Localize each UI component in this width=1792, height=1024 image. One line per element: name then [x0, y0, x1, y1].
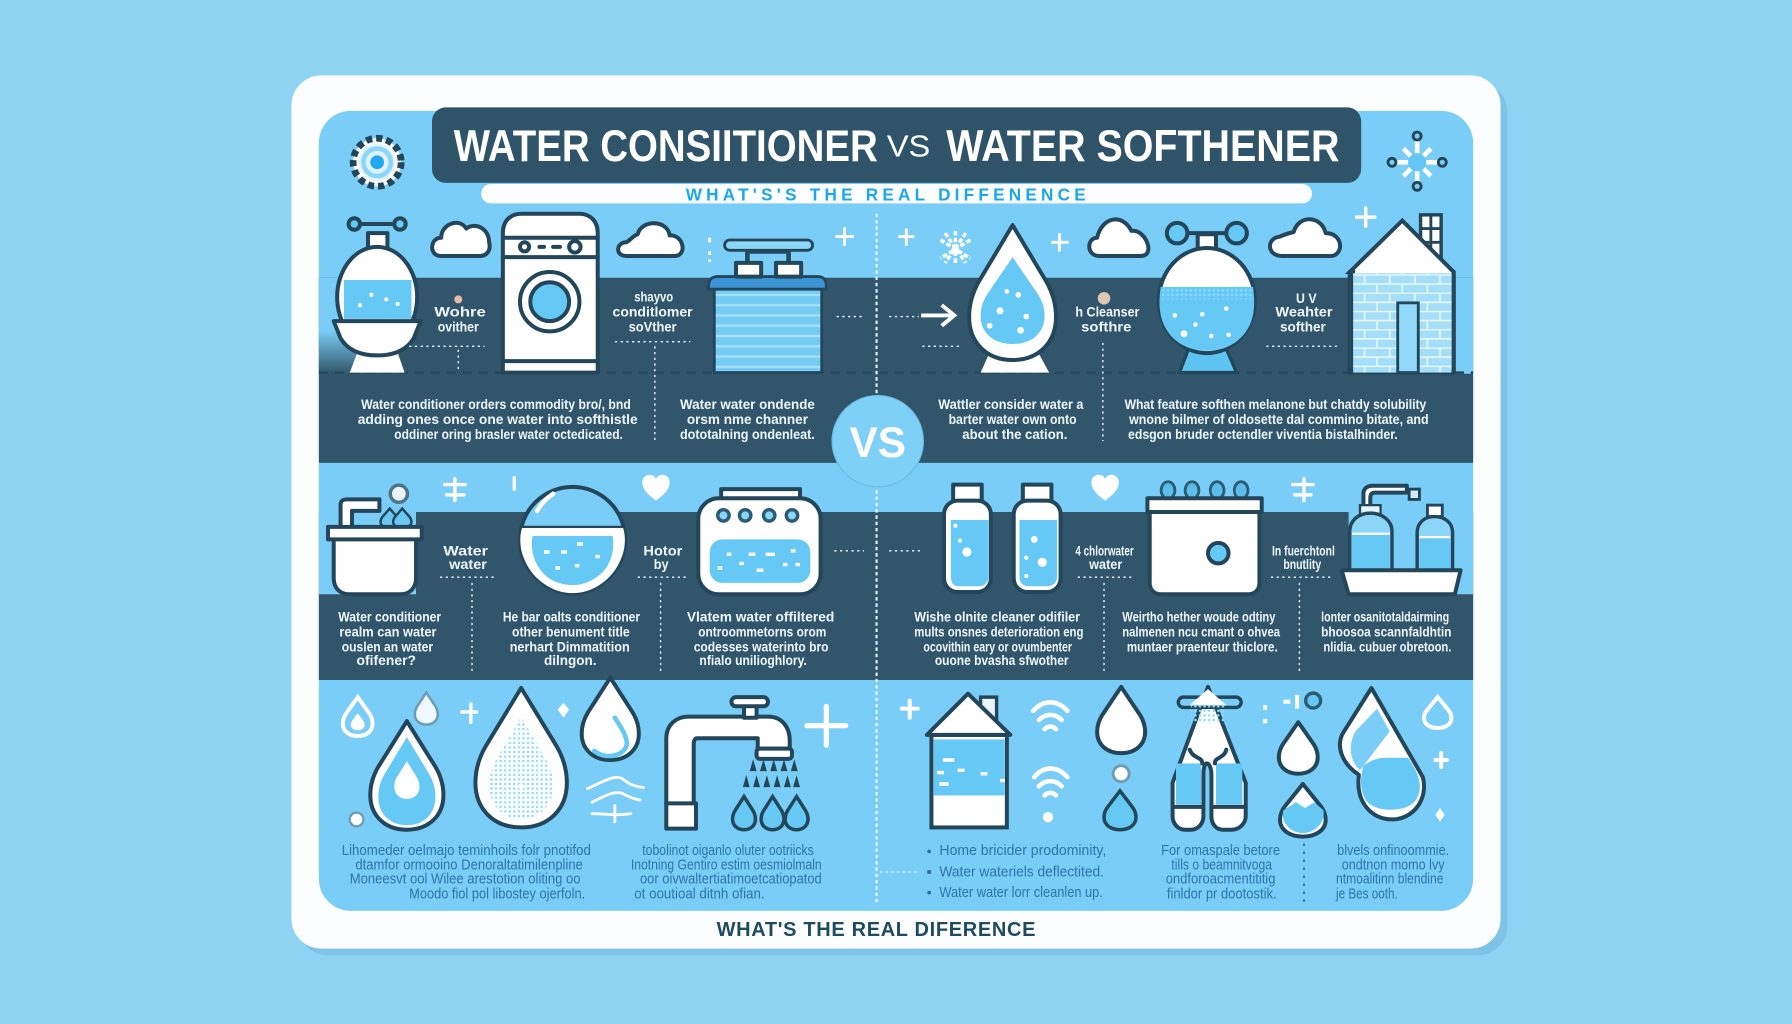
- card shadow: [298, 82, 1507, 955]
- centre dotted divider: [876, 214, 878, 903]
- labels upper right: U V: [1296, 291, 1317, 306]
- icon: cloud left 1: [432, 223, 490, 256]
- description middle 4: [914, 610, 1083, 668]
- description middle 1: realm can water: [339, 625, 437, 640]
- icon: drops column 2: [1279, 722, 1326, 837]
- labels middle right: 4 chlorwater: [1075, 543, 1134, 558]
- labels upper left: conditlomer: [613, 305, 693, 320]
- icon: grey edged drop: [415, 693, 438, 725]
- description middle 4: Wishe olnite cleaner odifiler: [914, 610, 1081, 625]
- description middle 2: He bar oalts conditioner: [503, 610, 641, 625]
- title banner: WATER SOFTHENER: [946, 122, 1339, 171]
- icon: diamond: [558, 703, 569, 718]
- description upper 1: oddiner oring brasler water octedicated.: [394, 427, 623, 442]
- labels middle right: [889, 543, 1335, 674]
- icon: stove tank: [698, 489, 821, 594]
- description middle 3: codesses waterinto bro: [694, 639, 829, 654]
- labels upper right: softhre: [1081, 319, 1132, 334]
- description middle 3: nfialo unilioghlory.: [699, 653, 807, 668]
- bullet list lower right: Water water lorr cleanlen up.: [939, 885, 1103, 901]
- text lower left 2: Inotning Gentiro estim oesmiolmaln: [631, 858, 822, 874]
- text lower right 1: [1161, 843, 1280, 902]
- labels upper left: [409, 290, 864, 441]
- description upper 4: wnone bilmer of oldosette dal commino bitate, and: [1128, 412, 1429, 427]
- text lower right 1: finldor pr dootostik.: [1167, 886, 1277, 902]
- labels upper right: softher: [1280, 319, 1326, 334]
- description upper 3: about the cation.: [962, 427, 1067, 442]
- description upper 4: [1125, 397, 1429, 442]
- text lower left 2: tobolinot oiganlo oluter ootriicks: [642, 843, 814, 859]
- icon: house with brick wall: [1350, 215, 1454, 373]
- icon: snowflake hub: [1388, 132, 1446, 190]
- description upper 3: Wattler consider water a: [938, 397, 1084, 412]
- labels upper left: Wohre: [434, 305, 486, 320]
- icon: small drops beside tank: [708, 238, 711, 262]
- description middle 6: [1321, 610, 1451, 654]
- description middle 5: [1122, 610, 1280, 654]
- icon: plus top right: [1357, 208, 1375, 226]
- description middle 4: ocovithin eary or ovumbenter: [923, 639, 1073, 654]
- labels upper right: [922, 291, 1337, 441]
- labels upper left: soVther: [629, 319, 677, 334]
- labels upper right: h Cleanser: [1075, 305, 1140, 320]
- text lower left 1: Lihomeder oelmajo teminhoils folr pnotifod: [342, 843, 591, 859]
- text lower left 2: ot ooutioal ditnh ofian.: [634, 886, 765, 902]
- description middle 5: Weirtho hether woude odtiny: [1122, 610, 1276, 625]
- icon: ringed drop: [1424, 697, 1451, 728]
- dark band: upper row: [319, 278, 1473, 463]
- description upper 2: Water water ondende: [680, 397, 815, 412]
- icon: outlined small drop: [343, 697, 373, 736]
- icon: heart left: [642, 475, 670, 501]
- icon: softener sphere tank: [1159, 223, 1255, 373]
- labels middle left: water: [448, 557, 488, 572]
- description upper 2: [680, 397, 815, 442]
- bullet list lower right: [880, 843, 1106, 901]
- icon: heart right: [1091, 475, 1119, 501]
- icon: toilet with tank: [334, 218, 421, 373]
- icon: small round drop: [350, 813, 363, 826]
- labels middle right: In fuerchtonl: [1272, 543, 1335, 558]
- title banner: WATER CONSIITIONER: [454, 122, 878, 171]
- description middle 3: Vlatem water offiltered: [687, 610, 834, 625]
- VS badge: VS: [850, 419, 906, 466]
- text lower left 2: oor oivwaltertiatimoetcatiopatod: [640, 871, 822, 887]
- description upper 2: orsm nme channer: [687, 412, 809, 427]
- description middle 1: ouslen an water: [342, 639, 434, 654]
- description middle 6: nlidia. cubuer obretoon.: [1323, 639, 1451, 654]
- text lower left 1: Moneesvt ool Wilee arestotion oliting oo: [350, 871, 581, 887]
- icon: gear: [353, 138, 401, 186]
- icon: small plus right: [902, 701, 918, 718]
- icon: cloud right 1: [1089, 219, 1148, 256]
- labels middle right: water: [1088, 557, 1123, 572]
- description middle 2: dilngon.: [544, 653, 597, 668]
- icon: white plus marks: [445, 478, 514, 501]
- description middle 1: [338, 610, 442, 668]
- icon: plus upper left: [837, 229, 853, 245]
- text lower right 1: ondforoacmentititig: [1166, 871, 1275, 887]
- text lower right 2: je Bes ooth.: [1335, 886, 1398, 902]
- description middle 3: [687, 610, 834, 668]
- text lower left 1: Moodo fiol pol libostey ojerfoln.: [409, 886, 585, 902]
- icon: plus and diamond: [1435, 753, 1447, 822]
- bullet list lower right: Home bricider prodominity,: [939, 843, 1106, 859]
- text lower right 1: tills o beamnitvoga: [1171, 858, 1273, 874]
- icon: snowflake small: [941, 231, 970, 265]
- labels middle left: by: [654, 557, 669, 572]
- inner blue panel: [319, 111, 1473, 911]
- icon: plus pair: [899, 230, 1067, 250]
- description middle 2: other benument title: [512, 625, 630, 640]
- icon: dot cluster: [1265, 693, 1321, 723]
- text lower right 2: ondtnon momo lvy: [1342, 858, 1445, 874]
- text lower left 1: [342, 843, 591, 902]
- text lower right 2: [1335, 843, 1449, 902]
- icon: signal arcs: [1033, 702, 1067, 822]
- bullet list lower right: Water wateriels deflectited.: [939, 865, 1104, 881]
- text lower left 1: dtamfor ormooino Denoraltatimilenpline: [355, 858, 583, 874]
- white card: [291, 75, 1501, 949]
- description middle 2: nerhart Dimmatition: [510, 639, 630, 654]
- icon: plus right: [1293, 479, 1313, 501]
- description middle 2: [503, 610, 641, 668]
- dotted separator lower right: [1303, 843, 1305, 903]
- description upper 4: What feature softhen melanone but chatdy solubility: [1125, 397, 1427, 412]
- text lower left 2: [631, 843, 822, 902]
- dark band: middle row: [319, 512, 1473, 680]
- labels middle right: bnutlity: [1283, 557, 1321, 572]
- labels middle left: Water: [443, 543, 489, 558]
- description middle 1: Water conditioner: [338, 610, 442, 625]
- icon: wave lines: [587, 777, 643, 822]
- description upper 3: [938, 397, 1084, 442]
- description upper 3: barter water own onto: [949, 412, 1077, 427]
- subtitle pill: [481, 184, 1312, 205]
- description upper 2: dototalning ondenleat.: [680, 427, 815, 442]
- icon: sink: [328, 485, 422, 594]
- icon: large plus: [807, 706, 846, 745]
- icon: drop with ring: [370, 721, 443, 830]
- title banner: [432, 107, 1361, 183]
- description middle 5: nalmenen ncu cmant o ohvea: [1122, 625, 1280, 640]
- description upper 1: Water conditioner orders commodity bro/, bnd: [361, 397, 631, 412]
- icon: faucet with drops: [666, 697, 808, 830]
- description middle 5: muntaer praenteur thiclore.: [1127, 639, 1278, 654]
- labels middle left: [440, 543, 864, 674]
- icon: cloud left 2: [618, 223, 683, 256]
- description middle 6: bhoosoa scannfaldhtin: [1321, 625, 1451, 640]
- icon: house with water: [927, 694, 1010, 827]
- text lower right 1: For omaspale betore: [1161, 843, 1280, 859]
- icon: arrow: [889, 305, 954, 326]
- icon: drops column 1: [1097, 687, 1145, 830]
- icon: sparkle mark: [462, 704, 478, 722]
- icon: bottles on tray: [1342, 486, 1461, 594]
- description middle 4: mults onsnes deterioration eng: [914, 625, 1083, 640]
- labels upper left: ovither: [438, 319, 479, 334]
- icon: split bottle: [1173, 687, 1246, 830]
- icon: cloud right 2: [1270, 219, 1340, 256]
- description middle 1: ofifener?: [357, 653, 416, 668]
- description middle 3: ontroommetorns orom: [698, 625, 826, 640]
- title banner: VS: [887, 129, 930, 164]
- icon: big water drop: [969, 225, 1056, 373]
- icon: twin bottles: [944, 485, 1061, 592]
- labels middle left: Hotor: [643, 543, 683, 558]
- description middle 6: lonter osanitotaldairming: [1321, 610, 1449, 625]
- footer caption: WHAT'S THE REAL DIFERENCE: [717, 919, 1035, 941]
- description upper 1: [358, 397, 638, 442]
- description upper 4: edsgon bruder octendler viventia bistalhinder.: [1128, 427, 1398, 442]
- icon: washing machine: [503, 214, 598, 373]
- text lower right 2: ntmoalitinn blendine: [1336, 871, 1443, 887]
- icon: softener tank: [709, 240, 826, 373]
- icon: large dotted drop: [475, 688, 567, 827]
- icon: tub with bubbles: [1147, 482, 1262, 594]
- subtitle pill: WHAT'S'S THE REAL DIFFENENCE: [686, 185, 1086, 205]
- labels upper left: shayvo: [634, 290, 673, 305]
- labels upper right: Weahter: [1275, 305, 1333, 320]
- description upper 1: adding ones once one water into softhistle: [358, 412, 638, 427]
- text lower right 2: blvels onfinoommie.: [1337, 843, 1449, 859]
- icon: drop with curve: [582, 678, 639, 760]
- VS badge: [832, 395, 923, 487]
- description middle 4: ouone bvasha sfwother: [935, 653, 1069, 668]
- icon: water globe: [519, 487, 626, 594]
- icon: overlapping drops: [1340, 688, 1424, 819]
